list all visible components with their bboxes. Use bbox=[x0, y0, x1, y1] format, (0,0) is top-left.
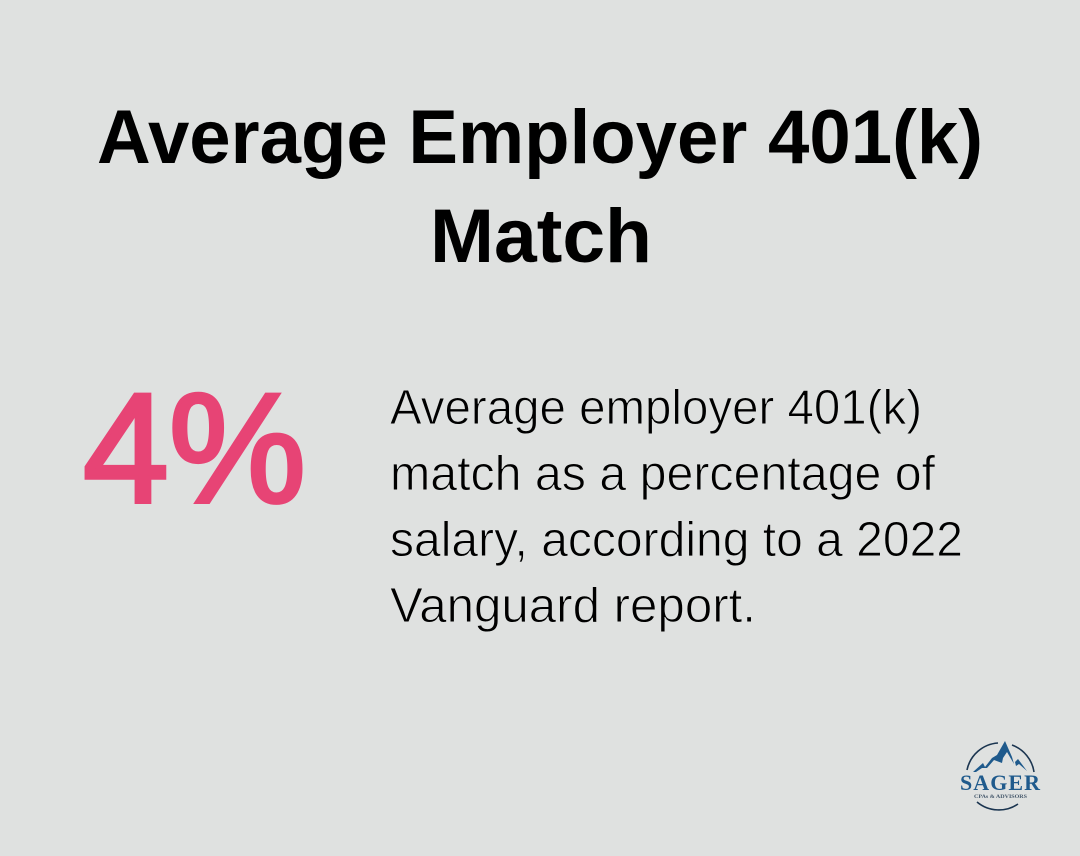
title bbox=[97, 95, 983, 279]
logo wordmark: SAGER bbox=[960, 770, 1041, 795]
big stat: 4%: 4% bbox=[83, 362, 306, 536]
description text bbox=[390, 381, 963, 633]
description text: salary, according to a 2022 bbox=[390, 513, 963, 567]
logo tagline: CPAs & ADVISORS bbox=[974, 795, 1027, 800]
title: Average Employer 401(k) bbox=[97, 95, 983, 180]
logo ring bbox=[967, 743, 1034, 810]
description text: Average employer 401(k) bbox=[390, 381, 922, 435]
description text: match as a percentage of bbox=[390, 447, 935, 501]
logo mountains bbox=[973, 741, 1014, 772]
logo: Sager CPAs & Advisors bbox=[960, 741, 1041, 810]
description text: Vanguard report. bbox=[390, 579, 756, 633]
title: Match bbox=[430, 194, 652, 279]
